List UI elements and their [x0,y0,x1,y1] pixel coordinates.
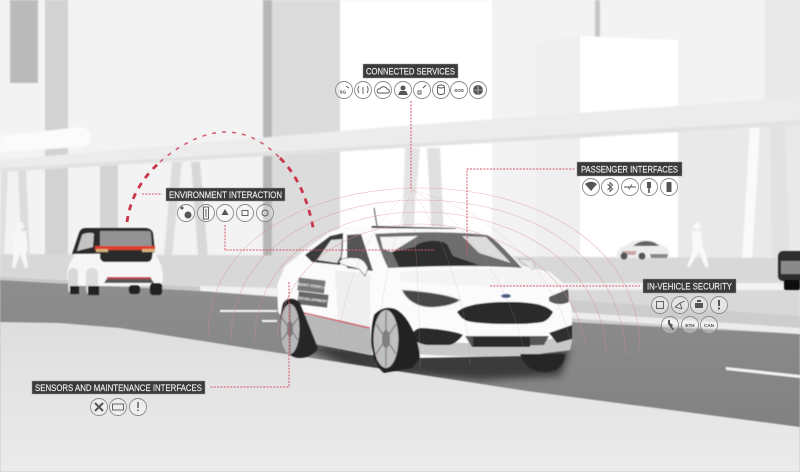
icon row one [652,296,728,314]
callout: passenger interfaces: PASSENGER INTERFACES [581,164,678,176]
road [0,277,800,472]
front headlights [402,290,460,307]
door decals: SMART VEHICLE [295,282,327,290]
mirror [339,258,368,276]
windshield [375,232,522,268]
callout: connected services: CONNECTED SERVICES [366,66,455,78]
icon row [178,204,274,222]
callout: in-vehicle security [643,279,736,334]
icon row [90,398,146,416]
sensor dome arcs [208,188,640,370]
pedestrian right [687,222,709,267]
hood shading [400,268,564,287]
callout: environment interaction: ENVIRONMENT INTERACTION [169,190,282,201]
heading tag [577,162,682,176]
upper tube road at left [0,127,90,152]
callout: sensors and maintenance interfaces: SENSORS AND MAINTENANCE INTERFACES [35,383,202,394]
heading tag [643,279,736,293]
icon row [582,178,678,196]
main white sedan [277,208,572,373]
callout: in-vehicle security: IN-VEHICLE SECURITY [647,282,732,292]
pedestrian left [12,222,28,268]
callout: environment interaction [166,188,285,222]
icon row: SOS [454,88,464,93]
callout: passenger interfaces [577,162,682,196]
icon row two: CAN [704,323,715,328]
lower door skirt [299,313,372,355]
red dashed arc over the pod car [127,132,314,232]
highway pillars [0,170,8,262]
lane markings [220,310,277,312]
car shadow [300,345,570,380]
red body stripes [300,312,410,339]
heading tag [363,64,458,78]
background: city buildings [0,0,800,340]
callout: sensors and maintenance interfaces [32,381,205,416]
callout: connected services [336,64,486,98]
white tower [536,36,580,260]
distant white car [617,240,669,260]
small autonomous pod car [67,228,163,295]
heading tag [166,188,285,201]
elevated highway [0,97,800,172]
far sidewalk [0,254,800,340]
car body [277,226,572,358]
bright curb strips [200,286,277,296]
lower bumper [410,328,463,345]
leader lines [142,101,640,387]
dark car at right edge [778,251,800,290]
door decals [295,277,329,308]
icon row two: ETH [685,323,695,328]
side windows [305,233,343,265]
grille [457,302,553,324]
icon row [336,82,486,98]
heading tag [32,381,205,394]
front wheel [371,308,420,373]
icon row: 5G [340,90,346,94]
door decals: DEVELOPMENT [298,296,328,304]
icon row two [662,316,718,334]
Ford badge [501,294,511,298]
right front wheel [520,354,565,372]
roof glass and antenna [371,226,457,229]
foreground sidewalk [0,322,800,472]
rear wheel [280,298,318,358]
door shading [335,270,370,328]
